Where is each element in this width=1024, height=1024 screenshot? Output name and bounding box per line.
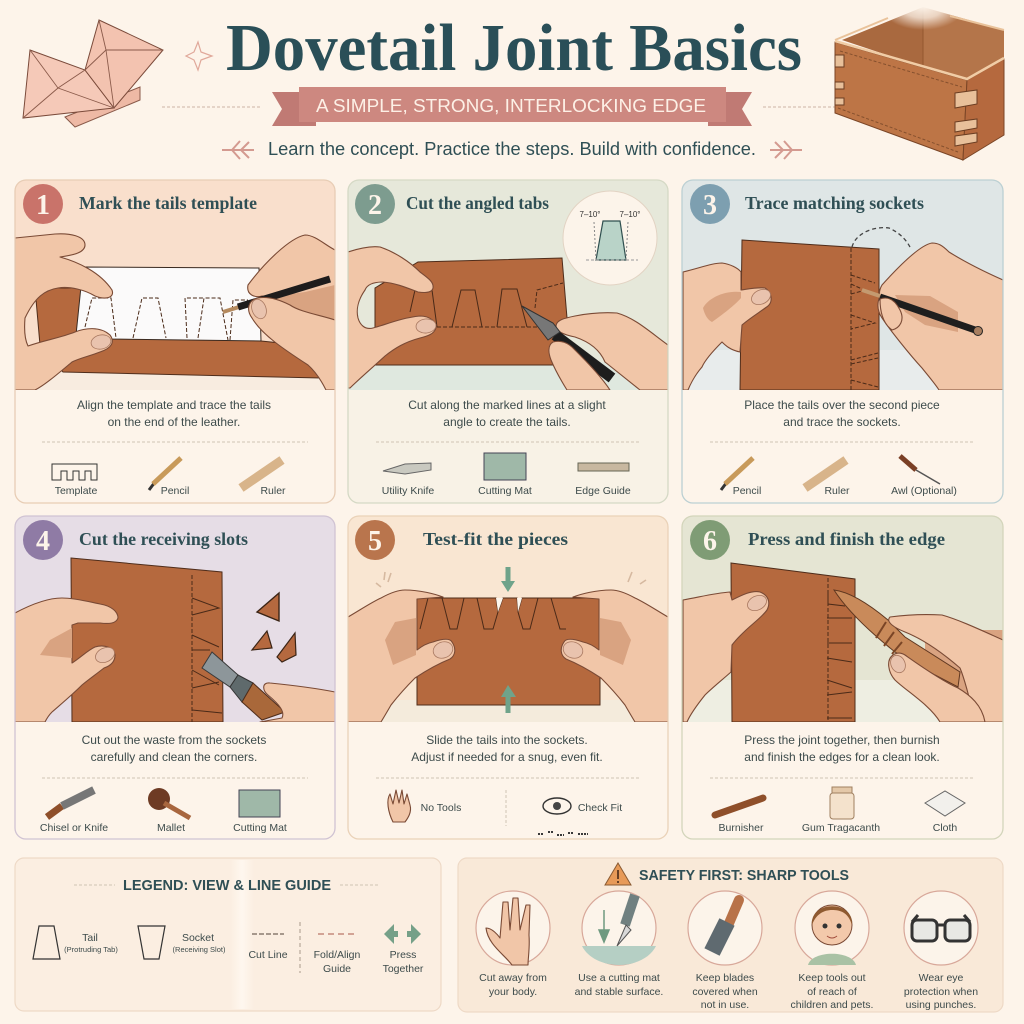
legend: socket	[138, 926, 226, 959]
legend: tail: Tail	[82, 932, 98, 944]
step 1 illustration	[15, 234, 335, 390]
step 5 description	[411, 733, 603, 764]
legend: press arrows	[383, 924, 424, 975]
tool: pencil: Pencil	[161, 485, 189, 497]
tool: gum tragacanth	[802, 787, 880, 834]
step 2 description: Cut along the marked lines at a slight	[408, 398, 606, 412]
step 2 angle inset	[563, 191, 657, 285]
tip 5	[904, 891, 978, 1011]
icon: right sprig	[770, 141, 802, 159]
step 6 description	[744, 733, 940, 764]
tool: mallet: Mallet	[157, 822, 185, 834]
legend: tail: (Protruding Tab)	[64, 945, 118, 954]
step 2 description	[408, 398, 606, 429]
step 1 description: on the end of the leather.	[108, 415, 240, 429]
panel: safety	[458, 858, 1003, 1012]
tool: burnisher	[715, 798, 764, 834]
tip 3	[688, 891, 762, 1011]
step 1 description	[77, 400, 271, 426]
step 4 illustration	[15, 558, 335, 722]
tool: no tools	[388, 790, 461, 822]
step 5 badge	[355, 520, 395, 560]
tool: cutting mat	[478, 453, 532, 497]
step 2 illustration	[348, 247, 668, 392]
step 1 badge	[23, 184, 63, 224]
step 5 heading: Test-fit the pieces	[423, 529, 568, 549]
step 3 badge: 3	[703, 190, 717, 221]
legend: fold guide	[314, 934, 360, 975]
tagline: Learn the concept. Practice the steps. Build with confidence.	[268, 139, 756, 159]
tip 2	[575, 891, 663, 998]
step 5 illustration	[348, 567, 668, 722]
tool: ruler	[805, 460, 850, 497]
tool: ruler	[241, 460, 286, 497]
tip 2: Use a cutting mat	[578, 972, 660, 984]
panel: step 3	[682, 180, 1003, 503]
legend: press arrows: Press	[390, 949, 416, 961]
step 1 heading: Mark the tails template	[79, 193, 257, 213]
step 6 heading: Press and finish the edge	[748, 529, 945, 549]
step 6 description: and finish the edges for a clean look.	[744, 750, 940, 764]
step 4 description: Cut out the waste from the sockets	[82, 733, 266, 747]
step 6 border	[682, 516, 1003, 839]
illustration: leather box	[835, 0, 1004, 160]
tool: pencil	[721, 458, 761, 497]
tool: pencil: Pencil	[733, 485, 761, 497]
panel: step 1	[15, 180, 335, 503]
tip 5: using punches.	[906, 999, 976, 1011]
step 6 description: Press the joint together, then burnish	[744, 733, 940, 747]
panel: step 6	[682, 516, 1003, 839]
tip 3: covered when	[692, 986, 758, 998]
step 2 angle inset: 7–10°	[580, 210, 600, 219]
tool: check fit	[543, 798, 622, 814]
legend: tail	[33, 926, 118, 959]
legend: cut line	[248, 934, 288, 961]
tool: chisel: Chisel or Knife	[40, 822, 108, 834]
tool: cutting mat	[233, 790, 287, 834]
tool: cutting mat: Cutting Mat	[478, 485, 532, 497]
step 3 description	[745, 400, 940, 426]
step 3 heading: Trace matching sockets	[745, 193, 924, 213]
tool: awl	[891, 456, 957, 497]
legend: fold guide: Guide	[323, 963, 351, 975]
step 6 illustration	[683, 563, 1003, 722]
tool: cloth: Cloth	[933, 822, 957, 834]
panel: step 4	[15, 516, 335, 839]
step 2 angle inset: 7–10°	[620, 210, 640, 219]
step 3 badge	[690, 184, 730, 224]
tool: cutting mat: Cutting Mat	[233, 822, 287, 834]
step 4 description: carefully and clean the corners.	[91, 750, 257, 764]
tool: pencil	[149, 458, 189, 497]
tool: no tools: No Tools	[421, 802, 461, 814]
tip 3: not in use.	[701, 999, 749, 1011]
step 5 description: Slide the tails into the sockets.	[426, 733, 588, 747]
tool: utility knife: Utility Knife	[382, 485, 434, 497]
tool: edge guide: Edge Guide	[575, 485, 631, 497]
step 4 border	[15, 516, 335, 839]
tip 1: Cut away from	[479, 972, 547, 984]
title: Dovetail Joint Basics	[226, 11, 802, 85]
tip 3: Keep blades	[696, 972, 754, 984]
tool: gum tragacanth: Gum Tragacanth	[802, 822, 880, 834]
tool: mallet	[148, 788, 190, 834]
step 6 badge	[690, 520, 730, 560]
icon: sparkle	[186, 42, 212, 70]
step 1 badge: 1	[36, 190, 50, 221]
icon: left sprig	[222, 141, 254, 159]
tip 1: your body.	[489, 986, 537, 998]
tip 4: children and pets.	[791, 999, 873, 1011]
tool: ruler: Ruler	[260, 485, 286, 497]
step 3 description: Place the tails over the second piece	[744, 398, 940, 412]
tip 5: protection when	[904, 986, 978, 998]
legend: fold guide: Fold/Align	[314, 949, 360, 961]
warning icon	[605, 863, 631, 885]
step 5 description: Adjust if needed for a snug, even fit.	[411, 750, 603, 764]
step 3 description: and trace the sockets.	[783, 415, 901, 429]
step 4 badge: 4	[36, 526, 50, 557]
tool: awl: Awl (Optional)	[891, 485, 957, 497]
step 1 description: Align the template and trace the tails	[77, 398, 271, 412]
tip 4	[791, 891, 873, 1011]
tool: check fit: Check Fit	[578, 802, 622, 814]
step 4 badge	[23, 520, 63, 560]
tip 4: Keep tools out	[798, 972, 866, 984]
panel: step 2	[348, 180, 668, 503]
legend heading: LEGEND: VIEW & LINE GUIDE	[123, 877, 331, 894]
tool: utility knife	[382, 463, 434, 497]
step 2 badge	[355, 184, 395, 224]
step 5 border	[348, 516, 668, 839]
step 3 border	[682, 180, 1003, 503]
legend: socket: (Receiving Slot)	[173, 945, 226, 954]
safety heading: SAFETY FIRST: SHARP TOOLS	[639, 867, 849, 884]
step 6 badge: 6	[703, 526, 717, 557]
step 4 description	[82, 736, 266, 764]
tool: edge guide	[575, 463, 631, 497]
step 5 badge: 5	[368, 526, 382, 557]
step 2 border	[348, 180, 668, 503]
step 2 badge: 2	[368, 190, 382, 221]
legend: socket: Socket	[182, 932, 214, 944]
step 2 description: angle to create the tails.	[443, 415, 571, 429]
tip 1	[476, 891, 550, 998]
tool: template	[52, 464, 97, 497]
icon: folded origami paper	[23, 20, 163, 127]
panel: step 5	[348, 516, 668, 839]
legend: cut line: Cut Line	[248, 949, 288, 961]
step 1 border	[15, 180, 335, 503]
tool: chisel	[40, 790, 108, 834]
subtitle ribbon: A SIMPLE, STRONG, INTERLOCKING EDGE	[316, 95, 706, 116]
step 3 illustration	[683, 228, 1003, 390]
panel: legend	[15, 858, 441, 1011]
tip 2: and stable surface.	[575, 986, 663, 998]
step 2 heading: Cut the angled tabs	[406, 193, 549, 213]
tip 4: of reach of	[807, 986, 857, 998]
tip 5: Wear eye	[919, 972, 964, 984]
step 4 heading: Cut the receiving slots	[79, 529, 248, 549]
tool: ruler: Ruler	[824, 485, 850, 497]
tool: burnisher: Burnisher	[719, 822, 764, 834]
legend: press arrows: Together	[383, 963, 424, 975]
tool: template: Template	[55, 485, 97, 497]
tool: cloth	[925, 791, 965, 834]
subtitle ribbon	[272, 87, 752, 126]
